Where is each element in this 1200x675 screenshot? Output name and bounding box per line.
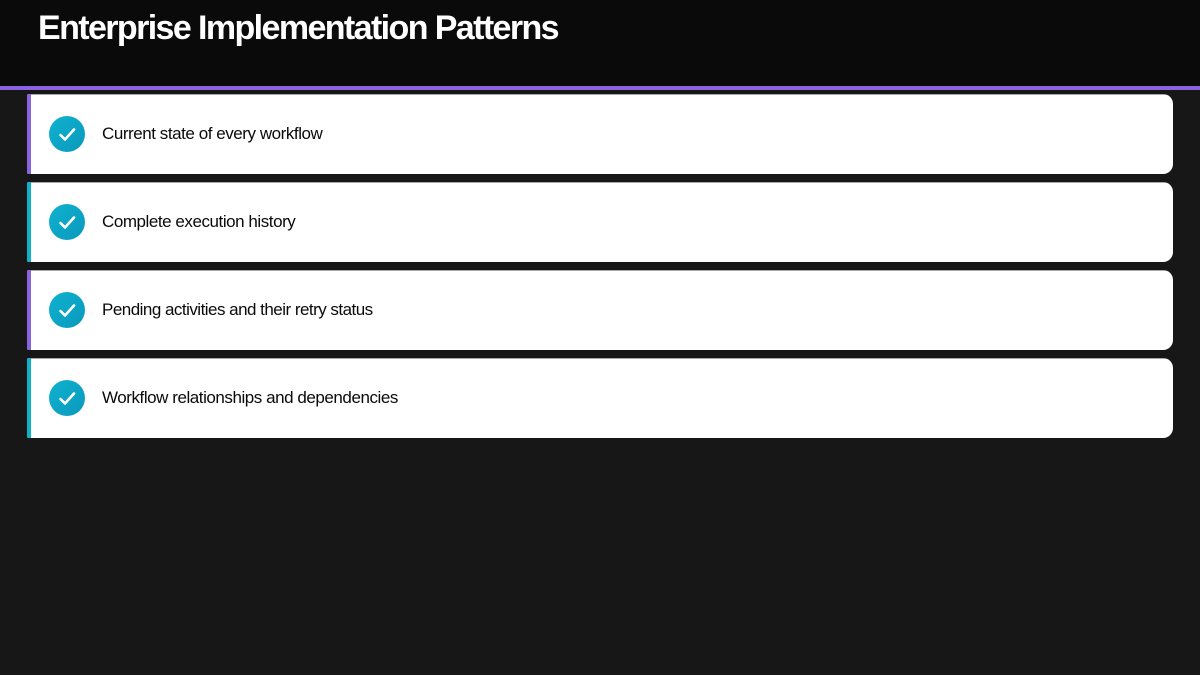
item text: Complete execution history — [102, 212, 295, 231]
icon: check circle — [49, 380, 85, 416]
item text: Pending activities and their retry status — [102, 300, 373, 319]
item text: Workflow relationships and dependencies — [102, 388, 398, 407]
accent bar: purple — [27, 94, 31, 174]
header band — [0, 0, 1200, 90]
checklist card: execution history — [27, 182, 1173, 262]
checklist card: workflow relationships — [27, 358, 1173, 438]
title: Enterprise Implementation Patterns — [38, 9, 558, 47]
icon: check circle — [49, 292, 85, 328]
accent bar: purple — [27, 270, 31, 350]
accent bar: teal — [27, 358, 31, 438]
checklist card: pending activities — [27, 270, 1173, 350]
icon: check circle — [49, 204, 85, 240]
checklist card: current state — [27, 94, 1173, 174]
icon: check circle — [49, 116, 85, 152]
item text: Current state of every workflow — [102, 124, 322, 143]
accent bar: teal — [27, 182, 31, 262]
